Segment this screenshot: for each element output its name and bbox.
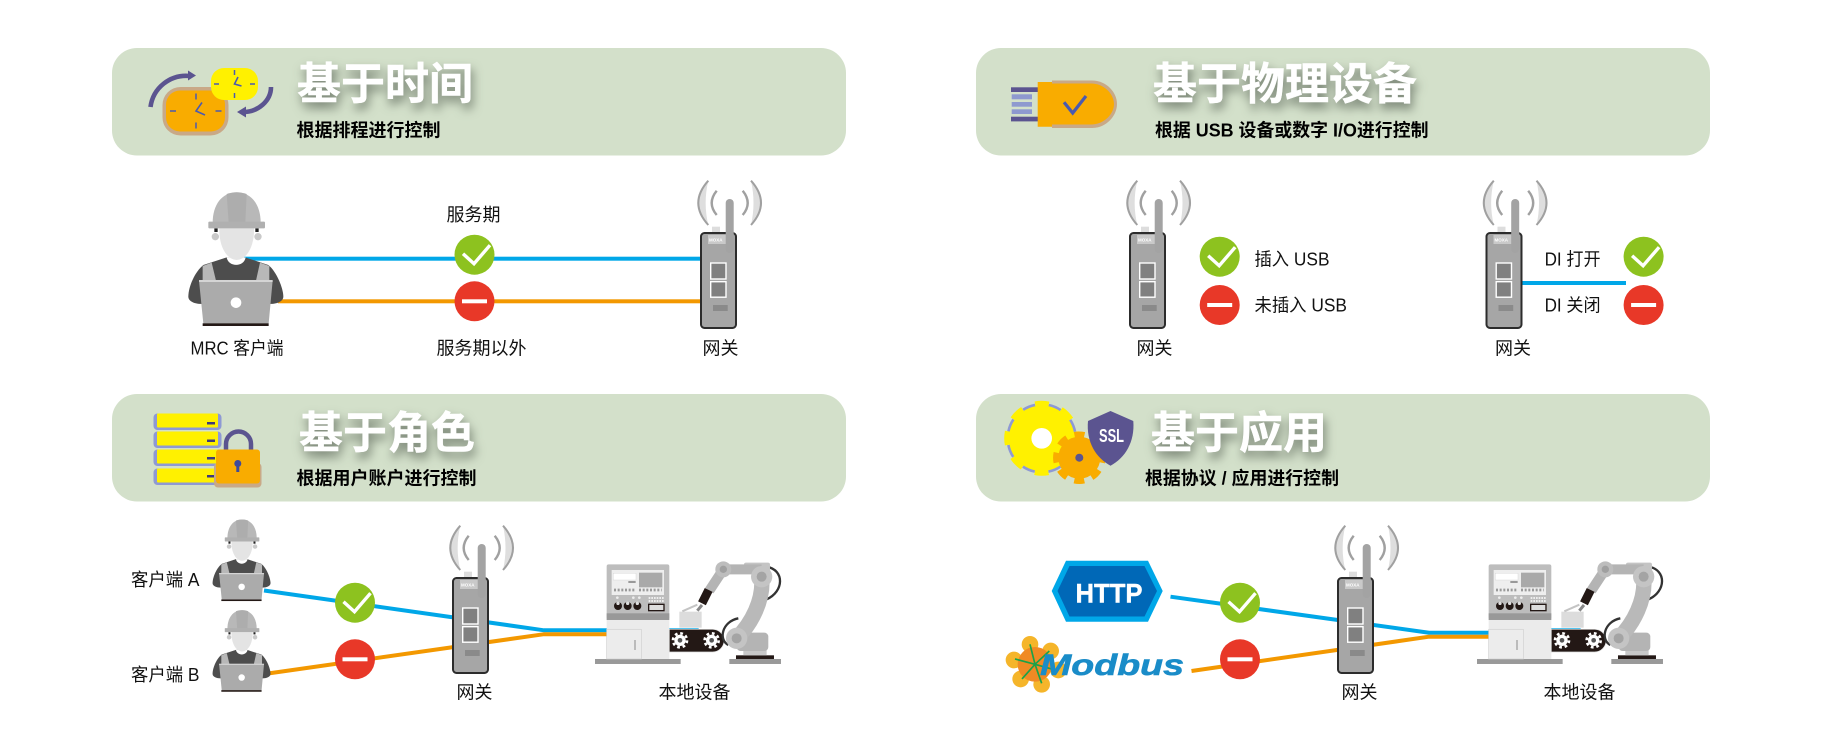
icon: HTTP hexagon	[1052, 561, 1163, 622]
icon: gears and SSL shield: SSL	[1099, 426, 1124, 446]
icon: USB not plugged	[1200, 285, 1240, 325]
illustration: local equipment with robot	[595, 561, 781, 664]
line: digital input	[1520, 281, 1626, 285]
icon: allow status	[1220, 583, 1260, 623]
subtitle: time: 根据排程进行控制	[296, 120, 440, 140]
icon: client B	[213, 610, 271, 692]
label: DI off: DI 关闭	[1545, 296, 1601, 316]
icon: USB plugged	[1200, 237, 1240, 277]
title: physical device: 基于物理设备	[1153, 60, 1417, 109]
icon: deny status	[1220, 639, 1260, 679]
icon: gateway: MOXA	[461, 582, 475, 588]
connection lines: allow and deny	[240, 257, 702, 303]
header band: role	[112, 394, 846, 502]
label: MRC client: MRC 客户端	[190, 338, 284, 358]
label: USB not plugged: 未插入 USB	[1254, 296, 1347, 316]
icon: DI on	[1624, 237, 1664, 277]
title: time: 基于时间	[297, 60, 473, 109]
title: application: 基于应用	[1151, 409, 1327, 458]
icon: client A	[213, 519, 271, 601]
label: USB plugged: 插入 USB	[1254, 250, 1330, 270]
illustration: local equipment with robot	[1477, 561, 1663, 664]
panel: application-based control	[976, 394, 1710, 702]
icon: DI off	[1624, 285, 1664, 325]
icon: clocks with cycle arrows	[150, 68, 271, 136]
label: gateway left: 网关	[1136, 338, 1172, 358]
icon: HTTP hexagon: HTTP	[1076, 579, 1142, 609]
label: local equipment: 本地设备	[1544, 682, 1616, 702]
icon: gateway: MOXA	[709, 238, 723, 242]
icon: allow status	[335, 583, 375, 623]
label: gateway: 网关	[702, 338, 738, 358]
icon: gateway	[450, 526, 513, 673]
label: client A: 客户端 A	[131, 570, 200, 590]
subtitle: application: 根据协议 / 应用进行控制	[1145, 468, 1339, 488]
icon: gateway	[698, 181, 761, 328]
icon: gateway	[1335, 526, 1398, 673]
label: local equipment: 本地设备	[658, 682, 730, 702]
panel: time-based control	[112, 48, 846, 358]
icon: deny status	[335, 639, 375, 679]
title: role: 基于角色	[299, 409, 475, 458]
header band: time	[112, 48, 846, 156]
icon: gateway: MOXA	[1346, 582, 1360, 588]
label: outside service period: 服务期以外	[436, 338, 526, 358]
icon: gateway left: MOXA	[1138, 238, 1152, 242]
icon: server stack with padlock	[154, 414, 262, 488]
label: gateway right: 网关	[1495, 338, 1531, 358]
icon: gears and SSL shield	[1008, 404, 1133, 481]
subtitle: role: 根据用户账户进行控制	[296, 468, 476, 488]
icon: MRC client technician	[188, 192, 283, 326]
connection lines: allow and deny	[264, 590, 607, 674]
icon: USB stick	[1011, 80, 1117, 128]
panel: role-based control	[112, 394, 846, 702]
label: gateway: 网关	[456, 682, 492, 702]
icon: gateway right: MOXA	[1494, 238, 1509, 242]
label: DI on: DI 打开	[1545, 250, 1601, 270]
label: client B: 客户端 B	[131, 665, 200, 685]
icon: gateway right	[1484, 181, 1546, 328]
label: gateway: 网关	[1342, 682, 1378, 702]
icon: gateway left	[1127, 181, 1190, 328]
icon: Modbus logo	[1006, 636, 1184, 693]
panel: physical device control	[976, 48, 1710, 358]
connection lines: allow and deny	[1170, 597, 1489, 671]
subtitle: physical device: 根据 USB 设备或数字 I/O进行控制	[1155, 120, 1428, 140]
header band: physical device	[976, 48, 1710, 156]
icon: deny status	[454, 281, 494, 321]
icon: Modbus logo: Modbus	[1040, 649, 1184, 682]
icon: allow status	[454, 235, 494, 275]
label: service period: 服务期	[446, 205, 500, 225]
header band: application	[976, 394, 1710, 502]
